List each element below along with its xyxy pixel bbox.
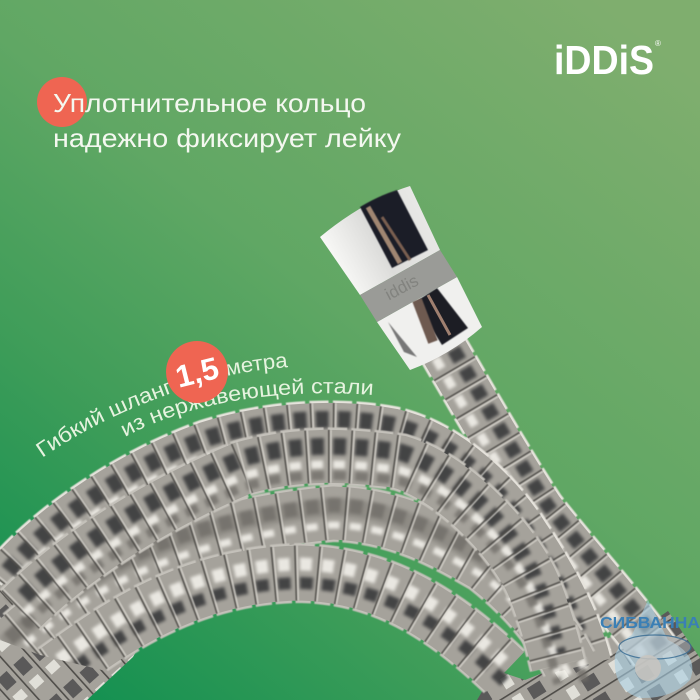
hose: all coils bbox=[0, 326, 700, 700]
caption: hose length and material: Гибкий шланг bbox=[36, 382, 170, 457]
hose: bottom-left run-off bbox=[0, 640, 110, 700]
watermark: droplet mascot: СИБВАННА bbox=[600, 615, 700, 632]
logo: iddis: ® bbox=[655, 39, 661, 48]
badge: red circle 1,5 bbox=[166, 341, 228, 403]
coupler: chrome fitting bbox=[320, 186, 482, 370]
caption: hose length and material: метра bbox=[227, 356, 288, 376]
heading: надежно фиксирует лейку bbox=[53, 123, 401, 153]
caption: hose length and material: из нержавеющей стали bbox=[121, 378, 372, 436]
logo: iddis: iDDiS bbox=[554, 37, 654, 83]
heading bbox=[53, 88, 401, 153]
badge: red circle behind heading bbox=[37, 77, 87, 127]
hose: bottom-right run-off bbox=[477, 611, 700, 700]
hose: third coil bbox=[5, 505, 570, 677]
watermark: droplet mascot bbox=[600, 600, 700, 698]
caption: hose length and material bbox=[36, 356, 372, 457]
coupler seal ring: iddis bbox=[382, 271, 422, 304]
coupler lower section bbox=[377, 277, 482, 370]
hose: top coil bbox=[5, 419, 585, 684]
badge: red circle 1,5: 1,5 bbox=[172, 350, 222, 395]
hose: bottom coil bbox=[55, 564, 505, 682]
hose: second coil bbox=[20, 446, 558, 684]
coupler upper section bbox=[320, 186, 440, 295]
hose: coupler run bbox=[422, 326, 663, 657]
hose: left textured fill bbox=[0, 500, 170, 700]
heading: Уплотнительное кольцо bbox=[53, 88, 366, 118]
coupler seal ring bbox=[360, 250, 457, 322]
